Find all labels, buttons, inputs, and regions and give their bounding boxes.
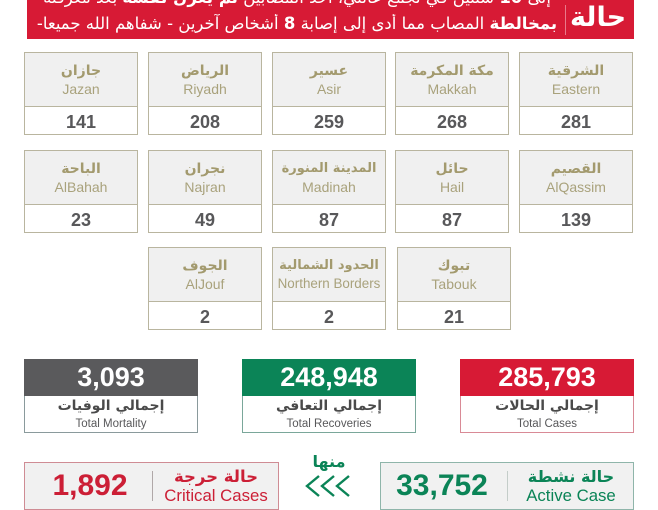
region card: AlJouf: 2 bbox=[200, 307, 210, 327]
region card: Madinah bbox=[272, 150, 386, 233]
region card: Jazan: 141 bbox=[66, 112, 96, 132]
critical cases label: Critical Cases bbox=[164, 486, 268, 505]
region card: Hail: Hail bbox=[440, 179, 464, 195]
stat: total mortality bbox=[24, 359, 198, 433]
region card: AlBahah bbox=[24, 150, 138, 233]
region card: Hail: 87 bbox=[442, 210, 462, 230]
region card: AlQassim: القصيم bbox=[551, 161, 601, 177]
stat: total cases: Total Cases bbox=[517, 418, 577, 430]
critical cases box bbox=[24, 462, 279, 510]
region card: AlBahah: الباحة bbox=[61, 161, 101, 177]
region card: Northern Borders bbox=[272, 247, 386, 330]
region card: AlBahah: AlBahah bbox=[55, 179, 107, 195]
region card: Jazan: جازان bbox=[61, 63, 101, 79]
region card: Madinah: المدينة المنورة bbox=[282, 161, 376, 176]
region card: Asir: Asir bbox=[317, 81, 341, 97]
region card: AlQassim bbox=[519, 150, 633, 233]
active divider bbox=[507, 471, 508, 501]
stat: total cases: إجمالي الحالات bbox=[495, 398, 599, 414]
active cases number: 33,752 bbox=[396, 469, 488, 502]
region card: Hail: حائل bbox=[435, 161, 469, 177]
stat: total recoveries: 248,948 bbox=[280, 362, 378, 392]
critical cases label: حالة حرجة bbox=[174, 467, 258, 486]
red banner bbox=[27, 0, 634, 39]
region card: AlBahah: 23 bbox=[71, 210, 91, 230]
region card: Asir: 259 bbox=[314, 112, 344, 132]
region card: AlQassim: AlQassim bbox=[546, 179, 606, 195]
critical cases label bbox=[164, 467, 268, 505]
region card: Tabouk bbox=[397, 247, 511, 330]
region card: Northern Borders: 2 bbox=[324, 307, 334, 327]
active cases label: حالة نشطة bbox=[528, 467, 614, 486]
region card: Asir bbox=[272, 52, 386, 135]
active cases label bbox=[526, 467, 616, 505]
region card: Riyadh: Riyadh bbox=[183, 81, 227, 97]
stat: total recoveries: Total Recoveries bbox=[286, 418, 372, 430]
region card: AlQassim: 139 bbox=[561, 210, 591, 230]
region card: Northern Borders: الحدود الشمالية bbox=[279, 258, 379, 273]
region card: Asir: عسير bbox=[310, 63, 348, 79]
stat: total mortality: 3,093 bbox=[77, 362, 145, 392]
region card: Najran: Najran bbox=[184, 179, 226, 195]
stat: total cases bbox=[460, 359, 634, 433]
region card: Hail bbox=[395, 150, 509, 233]
critical cases number: 1,892 bbox=[52, 469, 128, 502]
region card: Makkah: 268 bbox=[437, 112, 467, 132]
stat: total recoveries bbox=[242, 359, 416, 433]
critical divider bbox=[152, 471, 153, 501]
stat: total mortality: Total Mortality bbox=[76, 418, 146, 430]
region card: Makkah bbox=[395, 52, 509, 135]
banner text line 2: بمخالطة المصاب مما أدى إلى إصابة 8 أشخاص آخرين - شفاهم الله جميعا- bbox=[37, 14, 557, 33]
region card: Madinah: Madinah bbox=[302, 179, 356, 195]
region card: Tabouk: Tabouk bbox=[431, 276, 477, 292]
stat: total mortality: إجمالي الوفيات bbox=[58, 398, 164, 414]
region card: Jazan bbox=[24, 52, 138, 135]
region card: Madinah: 87 bbox=[319, 210, 339, 230]
region card: Riyadh bbox=[148, 52, 262, 135]
banner heading: حالة bbox=[570, 2, 626, 33]
region card: Najran bbox=[148, 150, 262, 233]
region card: AlJouf: AlJouf bbox=[186, 276, 224, 292]
region card: Tabouk: 21 bbox=[444, 307, 464, 327]
banner divider bbox=[565, 5, 566, 35]
arrows label: منها bbox=[312, 452, 346, 471]
region card: Tabouk: تبوك bbox=[438, 258, 470, 274]
region card: AlJouf: الجوف bbox=[182, 258, 228, 274]
region card: Eastern: الشرقية bbox=[548, 63, 604, 79]
region card: Eastern: Eastern bbox=[552, 81, 600, 97]
region card: Makkah: مكة المكرمة bbox=[410, 63, 494, 79]
icon: triple chevrons bbox=[305, 475, 350, 497]
region card: Najran: 49 bbox=[195, 210, 215, 230]
arrows with label bbox=[305, 452, 350, 497]
region card: Najran: نجران bbox=[185, 161, 225, 177]
stat: total recoveries: إجمالي التعافي bbox=[276, 398, 382, 414]
active cases label: Active Case bbox=[526, 486, 616, 505]
region card: Riyadh: الرياض bbox=[181, 63, 229, 79]
stat: total cases: 285,793 bbox=[498, 362, 596, 392]
region card: Makkah: Makkah bbox=[427, 81, 477, 97]
region card: Eastern bbox=[519, 52, 633, 135]
region card: AlJouf bbox=[148, 247, 262, 330]
region card: Northern Borders: Northern Borders bbox=[278, 276, 380, 291]
region card: Jazan: Jazan bbox=[62, 81, 100, 97]
active cases box bbox=[380, 462, 634, 510]
region card: Eastern: 281 bbox=[561, 112, 591, 132]
region card: Riyadh: 208 bbox=[190, 112, 220, 132]
